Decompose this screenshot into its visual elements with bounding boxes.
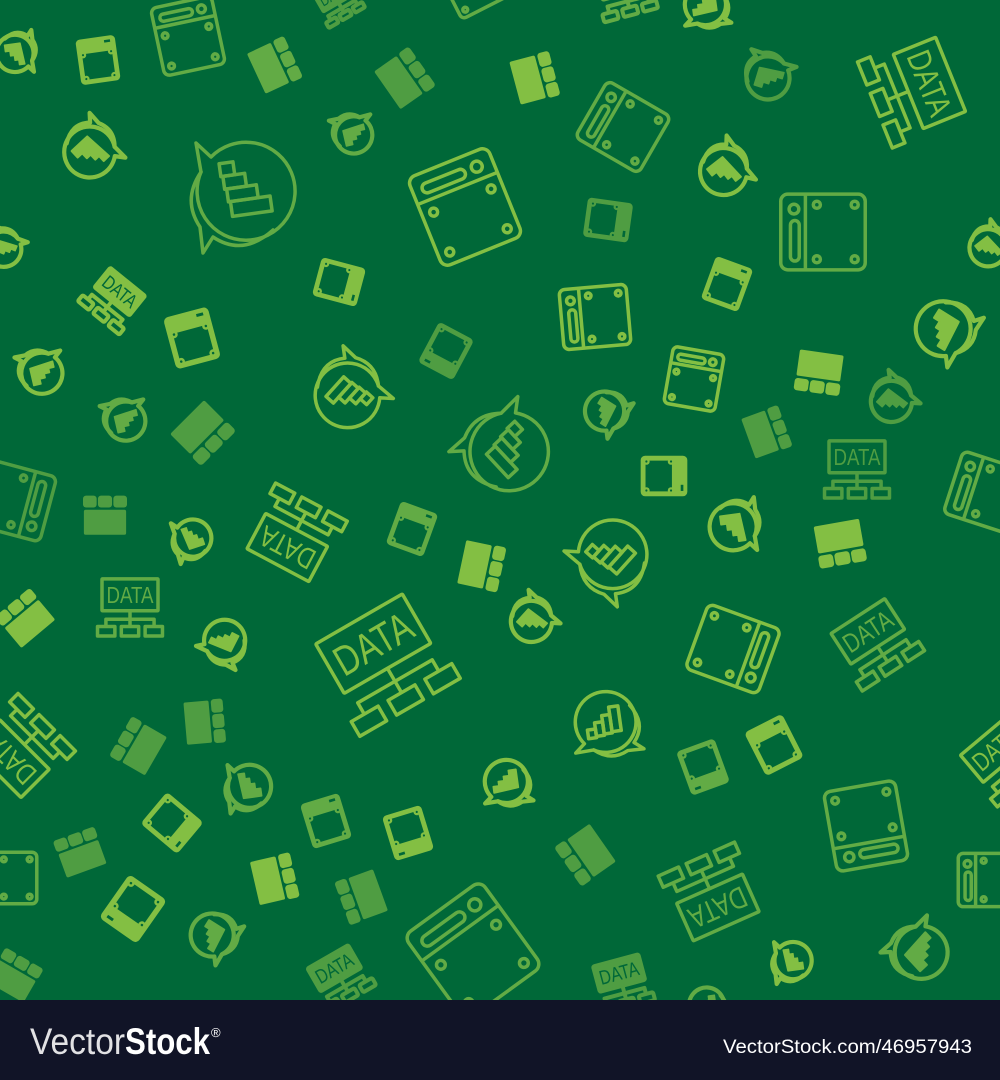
icon: data diagram bbox=[589, 953, 655, 1014]
icon: server bbox=[53, 826, 107, 878]
icon: server bbox=[250, 852, 300, 906]
icon: server bbox=[247, 36, 303, 95]
icon: chat chart bbox=[0, 226, 30, 269]
icon: chat chart bbox=[914, 299, 986, 370]
icon: server bbox=[813, 519, 867, 569]
VectorStock logo: Vector bbox=[30, 1021, 125, 1062]
icon: data diagram: DATA bbox=[833, 444, 881, 470]
icon: chat chart bbox=[582, 389, 636, 441]
VectorStock logo: ® bbox=[211, 1025, 221, 1040]
icon: data diagram: DATA bbox=[106, 582, 154, 608]
icon: chat chart bbox=[561, 506, 667, 612]
icon: data diagram bbox=[78, 265, 149, 335]
icon: chat chart bbox=[62, 110, 128, 180]
icon: board bbox=[386, 501, 438, 557]
icon: data diagram: DATA bbox=[837, 604, 899, 659]
icon: board bbox=[163, 306, 221, 370]
icon: server bbox=[509, 51, 561, 106]
icon: board bbox=[382, 805, 434, 861]
icon: chat chart bbox=[225, 765, 271, 814]
icon: data diagram: DATA bbox=[597, 958, 642, 990]
icon: board bbox=[75, 35, 121, 85]
icon: data diagram bbox=[827, 596, 925, 691]
icon: chat chart bbox=[575, 692, 644, 756]
icon: chat chart bbox=[744, 47, 799, 102]
icon: chat chart bbox=[313, 344, 396, 430]
icon: chat chart bbox=[685, 0, 731, 28]
icon: chat chart bbox=[877, 913, 958, 993]
icon: board bbox=[676, 738, 730, 796]
icon: server bbox=[183, 698, 226, 746]
icon: chat chart bbox=[698, 133, 758, 198]
icon: board bbox=[943, 451, 1000, 535]
icon: data diagram bbox=[242, 483, 347, 584]
icon: large board bbox=[407, 146, 523, 268]
icon: data diagram: DATA bbox=[312, 949, 358, 989]
icon: chat chart bbox=[868, 368, 923, 424]
icon: board bbox=[559, 284, 631, 350]
icon: data diagram bbox=[592, 0, 658, 22]
icon: server bbox=[109, 716, 167, 776]
VectorStock logo bbox=[30, 1021, 221, 1062]
icon: data diagram bbox=[957, 712, 1000, 807]
icon: data diagram bbox=[658, 842, 764, 943]
icon: board bbox=[151, 0, 225, 76]
icon: chat chart bbox=[14, 349, 64, 396]
icon: server bbox=[0, 947, 44, 1003]
icon: board bbox=[781, 194, 865, 270]
icon: board bbox=[300, 793, 352, 849]
icon: server bbox=[374, 46, 436, 110]
icon: chat chart bbox=[99, 398, 147, 443]
icon: board bbox=[436, 0, 508, 19]
icon: data diagram: DATA bbox=[254, 518, 321, 575]
icon: board bbox=[583, 197, 633, 243]
icon: chat chart bbox=[689, 987, 729, 1025]
icon: server bbox=[554, 823, 616, 887]
icon: server bbox=[793, 349, 845, 396]
icon: server bbox=[83, 496, 127, 535]
icon: board bbox=[701, 256, 753, 312]
icon: board bbox=[418, 322, 474, 380]
icon: server bbox=[169, 399, 236, 466]
icon: board bbox=[0, 458, 57, 542]
icon: board bbox=[685, 604, 781, 694]
icon: data diagram bbox=[98, 579, 162, 636]
icon: data diagram bbox=[858, 31, 968, 148]
icon: board bbox=[575, 80, 671, 174]
icon: large data diagram: DATA bbox=[325, 602, 421, 685]
footer bar bbox=[0, 1000, 1000, 1080]
icon: server bbox=[0, 588, 56, 649]
icon: data diagram bbox=[303, 942, 376, 1013]
icon: chat chart bbox=[710, 497, 759, 550]
icon: chat chart bbox=[447, 394, 550, 492]
icon: chat chart bbox=[182, 900, 248, 967]
icon: chat chart bbox=[0, 30, 36, 72]
VectorStock logo: Stock bbox=[125, 1021, 210, 1062]
icon: data diagram: DATA bbox=[97, 272, 141, 313]
icon: large board bbox=[404, 880, 542, 1022]
icon: board bbox=[744, 714, 804, 776]
icon: board bbox=[641, 456, 687, 496]
icon: chat chart bbox=[195, 612, 258, 674]
icon: board bbox=[0, 852, 37, 904]
icon: chat chart bbox=[485, 760, 534, 806]
image id caption: VectorStock.com/46957943 bbox=[723, 1037, 972, 1058]
icon: chat chart bbox=[169, 516, 215, 565]
icon: data diagram: DATA bbox=[899, 45, 958, 122]
icon: board bbox=[99, 874, 167, 944]
icon: data diagram bbox=[0, 694, 75, 801]
icon: chat chart bbox=[967, 217, 1000, 268]
icon: chat chart bbox=[328, 113, 374, 156]
icon: server bbox=[457, 539, 507, 593]
icon: board bbox=[664, 346, 724, 412]
icon: board bbox=[958, 853, 1000, 907]
icon: data diagram: DATA bbox=[683, 879, 752, 934]
icon: large chat chart bbox=[191, 142, 295, 253]
icon: board bbox=[140, 792, 204, 854]
icon: data diagram bbox=[311, 0, 365, 28]
icon: server bbox=[741, 405, 793, 459]
icon: data diagram bbox=[825, 441, 889, 498]
icon: chat chart bbox=[772, 942, 812, 984]
icon: large data diagram bbox=[309, 590, 460, 736]
icon: board bbox=[312, 257, 366, 307]
icon: chat chart bbox=[499, 587, 562, 650]
icon: board bbox=[823, 780, 909, 872]
icon: server bbox=[334, 868, 388, 926]
